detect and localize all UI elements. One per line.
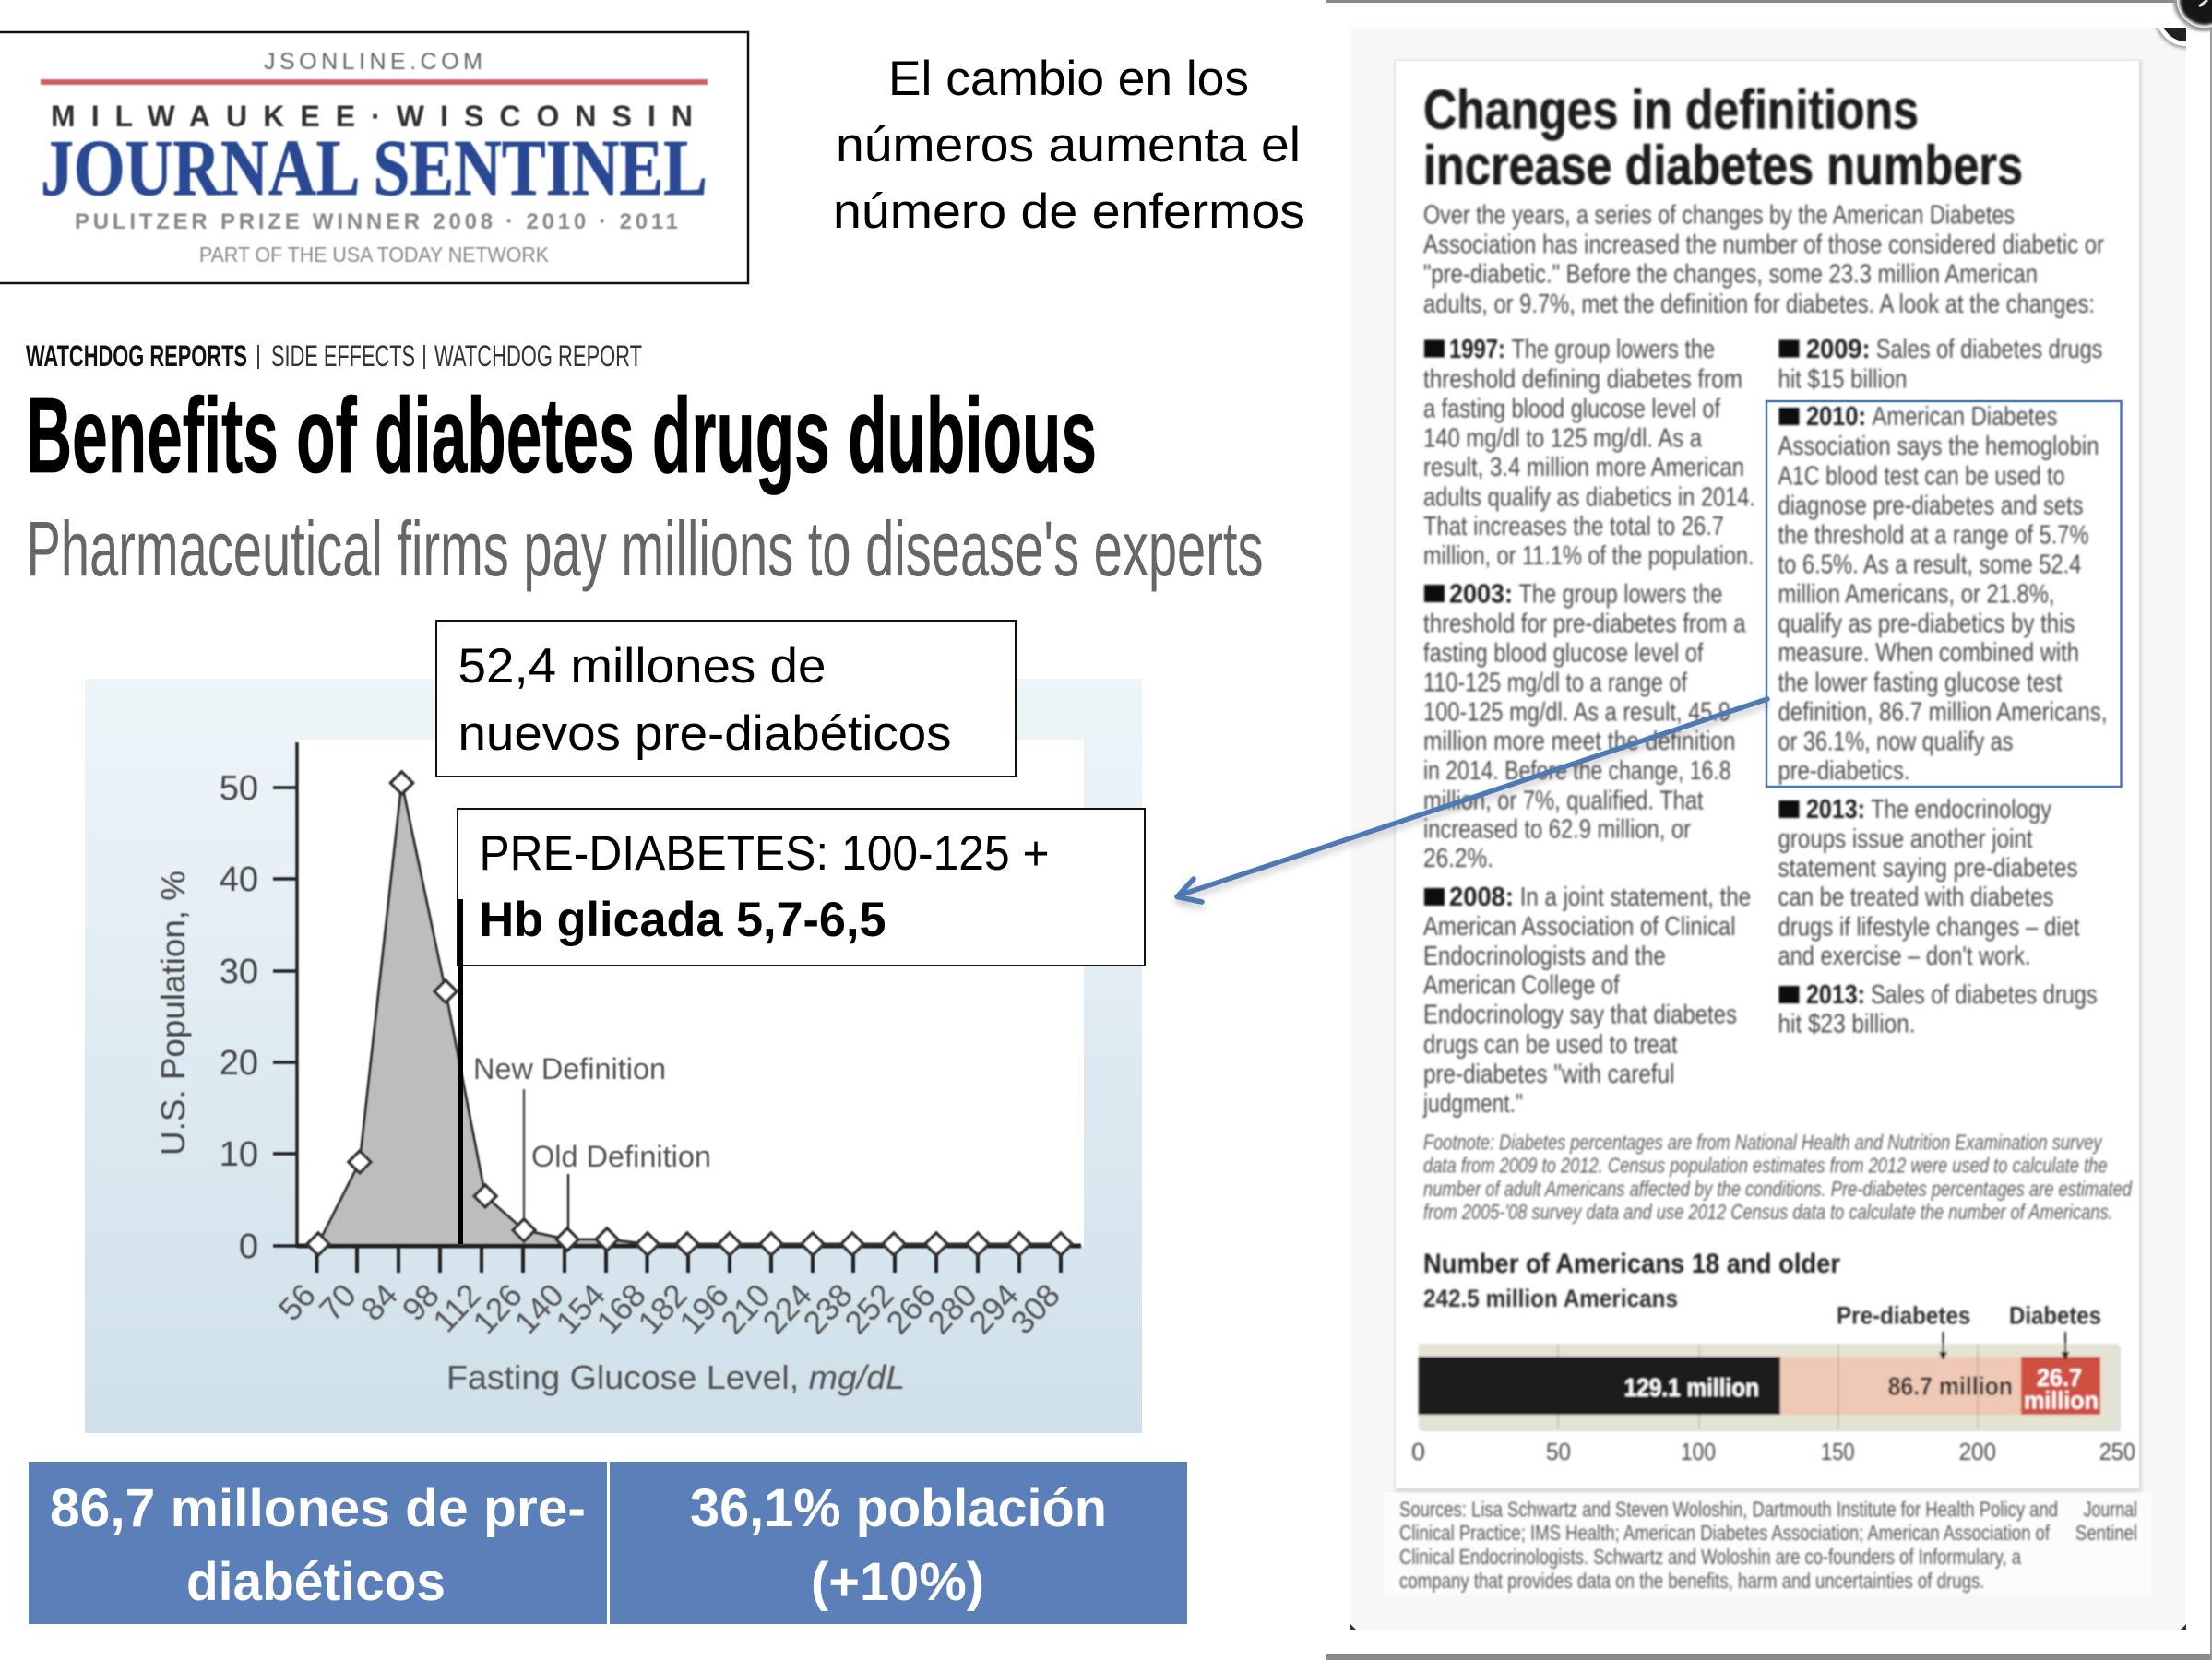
timeline entry: 2010: million Americans, or 21.8%, (1778, 579, 2055, 609)
x axis title: Fasting Glucose Level, mg/dL (446, 1358, 905, 1396)
x axis tick labels: 112 (426, 1277, 488, 1339)
timeline entry: 2009 (1778, 335, 2102, 394)
stacked bar chart: number of americans: 86.7 million (1888, 1372, 2013, 1400)
timeline entry: 2010: 2010: (1806, 402, 1866, 432)
breadcrumb: watchdog reports: WATCHDOG REPORT (434, 339, 642, 373)
timeline entry: 2003: increased to 62.9 million, or (1423, 815, 1691, 845)
stat box: 86,7 million pre-diabetics (29, 1462, 607, 1624)
x axis tick labels: 308 (1004, 1277, 1067, 1341)
stacked bar chart: number of americans: 26.7 (2037, 1364, 2082, 1392)
clipping heading (1423, 79, 2023, 196)
breadcrumb: watchdog reports: WATCHDOG REPORTS (26, 339, 247, 373)
timeline entry: 2003: in 2014. Before the change, 16.8 (1423, 756, 1730, 786)
timeline entry: 2013 joint statement (1778, 795, 2079, 971)
x axis tick labels: 154 (549, 1277, 612, 1341)
breadcrumb: watchdog reports: SIDE EFFECTS (271, 339, 415, 373)
timeline entry: 2009: Sales of diabetes drugs (1876, 335, 2102, 364)
timeline entry: 1997: adults qualify as diabetics in 2014. (1423, 482, 1755, 512)
clipping intro (1423, 200, 2104, 319)
timeline entry: 1997: million, or 11.1% of the population. (1423, 541, 1754, 571)
callout: 52,4 million new pre-diabetics (436, 621, 1016, 777)
x axis tick labels (272, 1277, 1067, 1341)
panel: fasting glucose chart (85, 679, 1142, 1433)
panel: newspaper logo: PULITZER PRIZE WINNER 2008 · 2010 · 2011 (75, 209, 678, 234)
x axis tick labels: 140 (507, 1277, 571, 1341)
x axis tick labels: 182 (631, 1277, 695, 1341)
timeline entry: 2013 joint statement: 2013: (1806, 795, 1865, 824)
stacked bar chart: number of americans: 129.1 million (1624, 1373, 1759, 1402)
timeline entry: 2008: Endocrinologists and the (1423, 942, 1666, 971)
y axis (273, 742, 297, 1248)
timeline entry: 2003: The group lowers the (1518, 579, 1723, 609)
callout: 52,4 million new pre-diabetics: 52,4 millones de (458, 639, 827, 694)
stacked bar chart: number of americans: 150 (1821, 1438, 1855, 1465)
clipping sources: Clinical Practice; IMS Health; American Diabetes Association; American Association of (1399, 1521, 2050, 1545)
y axis title: U.S. Population, % (154, 871, 192, 1156)
timeline entry: 2003: million more meet the definition (1423, 727, 1736, 756)
clipping sources: Sentinel (2075, 1521, 2137, 1545)
callout: pre-diabetes definition (458, 809, 1145, 966)
distribution line and diamond markers (307, 772, 1072, 1255)
clipping sources: Sources: Lisa Schwartz and Steven Woloshin, Dartmouth Institute for Health Policy and (1399, 1498, 2058, 1522)
timeline entry: 2013 joint statement: groups issue another joint (1778, 824, 2033, 854)
timeline entry: 2013 sales: 2013: (1806, 980, 1865, 1010)
x axis tick labels: 252 (838, 1277, 901, 1341)
callout: pre-diabetes definition: PRE-DIABETES: 100-125 + (480, 826, 1050, 881)
timeline entry: 2003 (1423, 579, 1746, 873)
timeline entry: 2010: or 36.1%, now qualify as (1778, 728, 2013, 757)
timeline entry: 2008: drugs can be used to treat (1423, 1030, 1677, 1060)
timeline entry: 2008: pre-diabetes "with careful (1423, 1060, 1675, 1089)
x axis tick labels: 266 (879, 1277, 943, 1341)
y axis tick labels: 0 (239, 1227, 258, 1266)
stacked bar chart: number of americans: 242.5 million Americans (1423, 1285, 1678, 1312)
timeline entry: 2013 joint statement: The endocrinology (1871, 795, 2051, 824)
x axis tick labels: 168 (589, 1277, 653, 1341)
x axis (297, 1246, 1081, 1273)
timeline entry: 2008: In a joint statement, the (1520, 883, 1751, 912)
timeline entry: 2010: qualify as pre-diabetics by this (1778, 610, 2075, 639)
clipping sources (1399, 1498, 2137, 1593)
timeline entry: 2003: 110-125 mg/dl to a range of (1423, 668, 1688, 697)
y axis tick labels: 10 (220, 1135, 258, 1174)
clipping intro: "pre-diabetic." Before the changes, some 23.3 million American (1423, 260, 2038, 290)
text block: spanish note on numbers: números aumenta el (836, 118, 1301, 172)
timeline entry: 1997 (1423, 335, 1755, 571)
timeline entry: 2010: American Diabetes (1873, 402, 2057, 432)
x axis tick labels: 280 (921, 1277, 984, 1341)
x axis tick labels: 126 (466, 1277, 529, 1341)
timeline entry: 2009: 2009: (1806, 335, 1871, 364)
timeline entry: 2008: American College of (1423, 970, 1620, 1000)
timeline entry: 2008: judgment." (1422, 1089, 1523, 1119)
clipping sources: company that provides data on the benefits, harm and uncertainties of drugs. (1399, 1569, 1985, 1593)
timeline entry: 2010: measure. When combined with (1778, 638, 2079, 668)
stacked bar chart: number of americans: 0 (1411, 1438, 1425, 1465)
arrow: from 2010 entry to pre-diabetes callout (1177, 699, 1767, 902)
timeline entry: 2010: to 6.5%. As a result, some 52.4 (1778, 550, 2081, 579)
subtitle: Pharmaceutical firms pay millions to disease's experts (26, 505, 1264, 592)
clipping heading: Changes in definitions (1423, 79, 1919, 140)
clipping intro: Over the years, a series of changes by the American Diabetes (1423, 200, 2015, 230)
timeline entry: 2013 joint statement: drugs if lifestyle changes – diet (1778, 912, 2079, 942)
clipping footnote (1423, 1130, 2133, 1224)
panel: newspaper logo (0, 32, 748, 283)
callout: 52,4 million new pre-diabetics: nuevos pre-diabéticos (458, 706, 952, 761)
stacked bar chart: number of americans: 50 (1546, 1438, 1571, 1465)
y axis tick labels: 50 (220, 769, 258, 808)
timeline entry: 1997: 140 mg/dl to 125 mg/dl. As a (1423, 424, 1703, 454)
stat box: 86,7 million pre-diabetics: 86,7 millones de pre- (50, 1478, 586, 1538)
timeline entry: 2003: threshold for pre-diabetes from a (1423, 610, 1746, 639)
timeline entry: 2010: definition, 86.7 million Americans, (1778, 697, 2107, 727)
timeline entry: 2003: 26.2%. (1423, 844, 1493, 873)
text block: spanish note on numbers (833, 52, 1305, 239)
timeline entry: 2010: the lower fasting glucose test (1778, 668, 2063, 697)
timeline entry: 2003: 100-125 mg/dl. As a result, 45.9 (1423, 697, 1730, 727)
breadcrumb: watchdog reports (26, 339, 642, 373)
timeline entry: 2003: million, or 7%, qualified. That (1423, 786, 1703, 815)
stacked bar chart: number of americans: Diabetes (2009, 1302, 2101, 1330)
stacked bar chart: number of americans: 250 (2099, 1438, 2135, 1465)
x axis tick labels: 294 (962, 1277, 1026, 1341)
panel: newspaper logo: JSONLINE.COM (264, 49, 482, 75)
clipping sources: Clinical Endocrinologists. Schwartz and Woloshin are co-founders of Informulary, a (1399, 1545, 2021, 1569)
stacked bar chart: number of americans: million (2024, 1387, 2099, 1415)
timeline entry: 2010: diagnose pre-diabetes and sets (1778, 492, 2083, 521)
definition markers (473, 1052, 711, 1239)
timeline entry: 2013 joint statement: can be treated with diabetes (1778, 883, 2053, 912)
x axis tick labels: 210 (714, 1277, 778, 1341)
timeline entry: 2008 (1422, 883, 1751, 1119)
y axis tick labels: 40 (220, 860, 258, 899)
chart area: population distribution (318, 783, 648, 1244)
x axis tick labels: 56 (272, 1277, 323, 1328)
text block: spanish note on numbers: El cambio en los (888, 52, 1249, 106)
timeline entry: 2003: 2003: (1449, 579, 1513, 609)
timeline entry: 1997: The group lowers the (1511, 335, 1715, 364)
stacked bar chart: number of americans: 100 (1681, 1438, 1716, 1465)
timeline entry: 2003: fasting blood glucose level of (1423, 639, 1704, 669)
callout: pre-diabetes definition: Hb glicada 5,7-6,5 (480, 893, 886, 947)
timeline entry: 2010: A1C blood test can be used to (1778, 461, 2064, 491)
x axis tick labels: 70 (313, 1277, 363, 1328)
stacked bar chart: number of americans: Number of Americans 18 and older (1423, 1249, 1840, 1279)
timeline entry: 2010: Association says the hemoglobin (1778, 432, 2099, 461)
text block: spanish note on numbers: número de enfermos (833, 184, 1305, 239)
timeline entry: 2008: Endocrinology say that diabetes (1423, 1001, 1737, 1030)
stat box: 36,1 percent of population: 36,1% población (690, 1478, 1107, 1538)
panel: newspaper logo: MILWAUKEE·WISCONSIN (51, 100, 693, 133)
x axis tick labels: 224 (755, 1277, 819, 1341)
stat box: 36,1 percent of population (610, 1462, 1187, 1624)
timeline entry: 1997: a fasting blood glucose level of (1423, 395, 1721, 424)
definition markers: New Definition (473, 1052, 666, 1085)
timeline entry: 2008: 2008: (1449, 883, 1514, 912)
definition markers: Old Definition (531, 1140, 711, 1173)
threshold line (458, 899, 463, 1244)
clipping sources: Journal (2084, 1498, 2137, 1522)
timeline entry: 1997: threshold defining diabetes from (1423, 364, 1742, 394)
timeline entry: 1997: result, 3.4 million more American (1423, 453, 1744, 482)
panel: newspaper logo: JOURNAL SENTINEL (41, 123, 708, 212)
stacked bar chart: number of americans (1411, 1249, 2135, 1465)
clipping heading: increase diabetes numbers (1423, 135, 2023, 196)
timeline entry: 2010 (1778, 402, 2107, 786)
timeline entry: 2013 sales (1778, 980, 2098, 1038)
stat box: 36,1 percent of population: (+10%) (811, 1552, 984, 1612)
timeline entry: 2013 sales: Sales of diabetes drugs (1871, 980, 2098, 1010)
stacked bar chart: number of americans: 200 (1959, 1438, 1996, 1465)
y axis tick labels (220, 769, 258, 1266)
panel: newspaper clipping (1326, 0, 2212, 1660)
timeline entry: 2013 joint statement: and exercise – don't work. (1778, 942, 2031, 971)
stat box: 86,7 million pre-diabetics: diabéticos (186, 1552, 446, 1612)
x axis tick labels: 196 (672, 1277, 736, 1341)
x axis tick labels: 238 (796, 1277, 860, 1341)
timeline entry: 2008: American Association of Clinical (1423, 912, 1736, 942)
x axis tick labels: 98 (396, 1277, 446, 1328)
timeline entry: 2009: hit $15 billion (1778, 364, 1908, 394)
title: Benefits of diabetes drugs dubious (26, 375, 1097, 495)
y axis tick labels: 20 (220, 1044, 258, 1083)
timeline entry: 2010: pre-diabetics. (1778, 756, 1909, 786)
timeline entry: 2013 joint statement: statement saying pre-diabetes (1778, 854, 2077, 883)
x axis tick labels: 84 (354, 1277, 405, 1328)
timeline entry: 1997: That increases the total to 26.7 (1423, 512, 1724, 541)
y axis tick labels: 30 (220, 953, 258, 991)
highlight box: 2010 entry (1766, 401, 2122, 787)
panel: newspaper logo: PART OF THE USA TODAY NETWORK (199, 243, 550, 267)
timeline entry: 2010: the threshold at a range of 5.7% (1778, 521, 2088, 551)
stacked bar chart: number of americans: Pre-diabetes (1837, 1302, 1970, 1330)
timeline entry: 2013 sales: hit $23 billion. (1778, 1009, 1915, 1038)
timeline entry: 1997: 1997: (1449, 335, 1505, 364)
